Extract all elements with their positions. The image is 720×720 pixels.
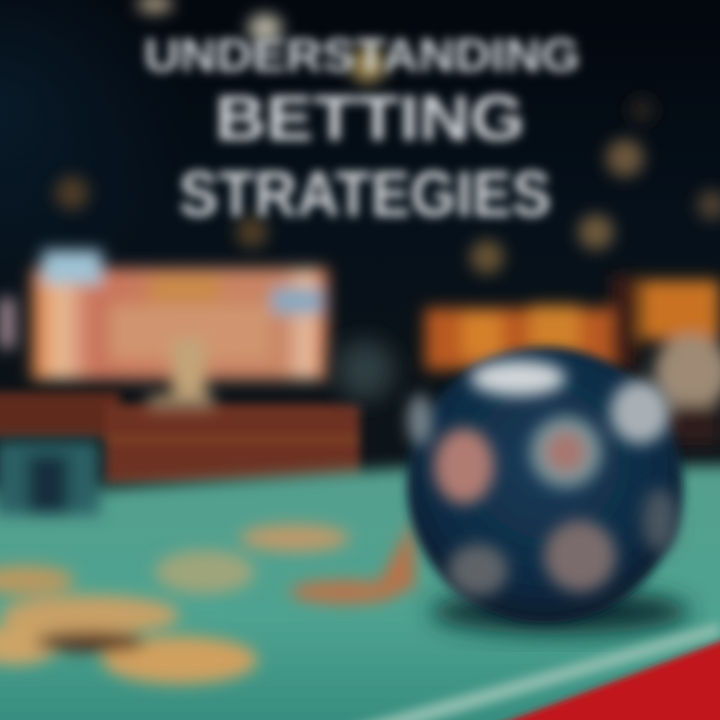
dark object beside the ball [335, 340, 395, 400]
background: blue haze at upper left [0, 0, 200, 300]
felt table surface [0, 465, 720, 720]
ball patch center [530, 416, 602, 488]
ball patch far right [642, 488, 678, 552]
ball patch top [470, 360, 566, 396]
chips: scattered gold chips [0, 518, 415, 684]
figure: central trophy [148, 338, 214, 409]
ball: patterned sphere [407, 347, 683, 623]
title line 3: STRATEGIES [179, 158, 551, 230]
ball patch right [610, 380, 670, 444]
ball patch far left [408, 394, 432, 446]
ball patch lower left [448, 544, 508, 596]
ball patch bottom [544, 520, 616, 592]
title line 1: UNDERSTANDING [144, 29, 580, 81]
table edge: white stripe [340, 622, 720, 720]
table corner: red [485, 638, 720, 720]
title [144, 29, 580, 230]
chip stack: teal block at left [0, 440, 100, 515]
title line 2: BETTING [215, 82, 525, 154]
shadow under ball [430, 590, 690, 634]
building: right orange facade [425, 275, 720, 445]
decorative lights [55, 0, 720, 274]
ball patch left [434, 428, 494, 504]
building: left casino facade [0, 250, 328, 380]
table: wooden counter [0, 392, 360, 484]
